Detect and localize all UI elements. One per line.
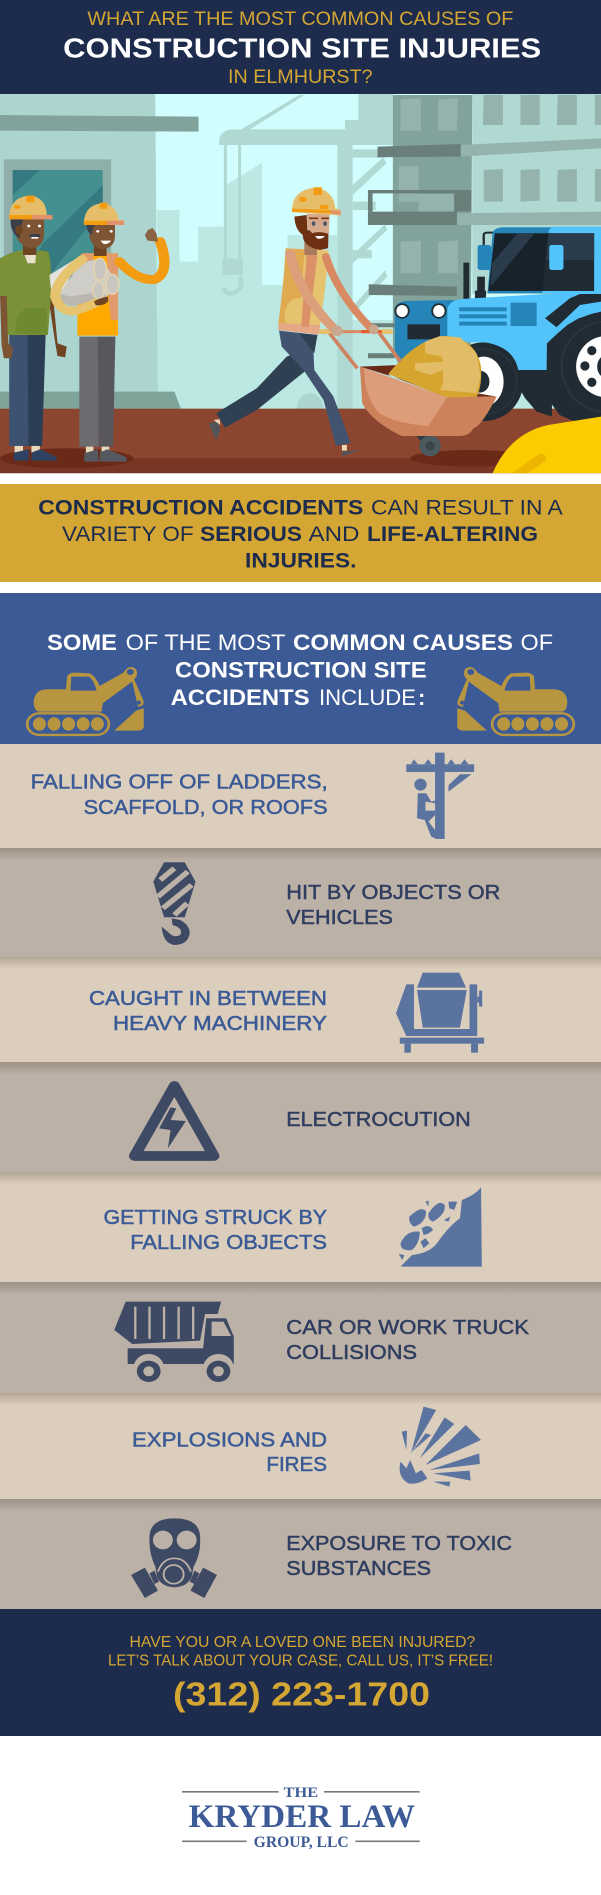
- blue heading line 1: SOME: [47, 630, 117, 655]
- row 8 text: SUBSTANCES: [286, 1557, 431, 1580]
- row 7 text: FIRES: [266, 1453, 327, 1476]
- row: hit by objects or vehicles: [0, 848, 601, 957]
- row: electrocution: [0, 1062, 601, 1172]
- logo word: the: THE: [284, 1785, 318, 1801]
- row: exposure to toxic substances: [0, 1499, 601, 1609]
- icon: rockslide: [399, 1187, 482, 1267]
- yellow mound: [493, 417, 601, 473]
- gold banner line 2: [62, 523, 538, 546]
- row 1 text: FALLING OFF OF LADDERS,: [31, 770, 328, 793]
- tractor: [394, 227, 601, 422]
- wheelbarrow: [321, 332, 497, 456]
- row: explosions and fires: [0, 1393, 601, 1499]
- left worker: [0, 196, 67, 461]
- gold banner line 1: [38, 496, 563, 519]
- row 4 text: ELECTROCUTION: [286, 1108, 471, 1131]
- blue heading line 1: COMMON CAUSES: [293, 630, 513, 655]
- row 6 text: COLLISIONS: [286, 1341, 417, 1364]
- blue heading line 3: INCLUDE: [319, 685, 416, 710]
- phone number: (312) 223-1700: [173, 1676, 430, 1713]
- header line 1: WHAT ARE THE MOST COMMON CAUSES OF: [87, 8, 513, 30]
- blue heading line 3: :: [418, 685, 425, 710]
- gold banner line 1: CONSTRUCTION ACCIDENTS: [38, 496, 363, 519]
- icon: excavator right: [457, 667, 574, 735]
- gold banner line 2: VARIETY OF: [62, 523, 194, 546]
- logo word: group llc: GROUP, LLC: [254, 1834, 349, 1851]
- icon: dump truck: [114, 1302, 234, 1384]
- hero illustration: construction workers and tractor: [0, 94, 601, 475]
- row 3 text: [89, 987, 327, 1035]
- icon: cement mixer: [396, 973, 484, 1053]
- icon: worker climbing pole: [406, 753, 474, 839]
- gold statement banner: [0, 484, 601, 582]
- call to action panel: [0, 1609, 601, 1736]
- logo: The Kryder Law Group, LLC: [182, 1785, 420, 1851]
- row 7 text: [132, 1428, 327, 1476]
- row 3 text: CAUGHT IN BETWEEN: [89, 987, 327, 1010]
- icon: explosion burst: [400, 1407, 481, 1487]
- row 5 text: [104, 1206, 327, 1254]
- gold banner line 3: INJURIES.: [245, 550, 356, 573]
- blue heading line 1: OF THE MOST: [126, 630, 286, 655]
- row 2 text: HIT BY OBJECTS OR: [286, 881, 500, 904]
- row 8 text: [286, 1532, 512, 1580]
- call to action text: LET’S TALK ABOUT YOUR CASE, CALL US, IT’S FREE!: [108, 1653, 493, 1670]
- row 3 text: HEAVY MACHINERY: [113, 1012, 327, 1035]
- row: caught in between heavy machinery: [0, 957, 601, 1062]
- row 6 text: CAR OR WORK TRUCK: [286, 1316, 529, 1339]
- row: getting struck by falling objects: [0, 1172, 601, 1282]
- row: car or work truck collisions: [0, 1282, 601, 1393]
- header banner: [0, 0, 601, 94]
- row 7 text: EXPLOSIONS AND: [132, 1428, 327, 1452]
- row 5 text: GETTING STRUCK BY: [104, 1206, 327, 1229]
- blue heading line 3: ACCIDENTS: [171, 685, 310, 710]
- icon: excavator left: [27, 667, 144, 735]
- row 1 text: [31, 770, 328, 819]
- icon: electrical hazard triangle: [135, 1086, 214, 1156]
- gold banner line 1: CAN RESULT IN A: [371, 496, 563, 519]
- icon: crane hook: [153, 862, 195, 945]
- row 5 text: FALLING OBJECTS: [130, 1231, 327, 1254]
- header title: CONSTRUCTION SITE INJURIES: [63, 32, 541, 63]
- row 2 text: VEHICLES: [286, 906, 393, 929]
- row 6 text: [286, 1316, 529, 1364]
- gold banner line 2: LIFE-ALTERING: [367, 523, 538, 546]
- header line 3: IN ELMHURST?: [228, 66, 373, 88]
- logo word: kryder law: KRYDER LAW: [189, 1799, 415, 1835]
- gold banner line 2: SERIOUS: [200, 523, 302, 546]
- blue heading line 3: [171, 685, 425, 710]
- crane: [219, 94, 393, 410]
- icon: gas mask: [131, 1518, 217, 1598]
- row: falling off of ladders: [0, 744, 601, 848]
- row 2 text: [286, 881, 500, 929]
- right worker holding rolled plans: [49, 203, 164, 462]
- row 1 text: SCAFFOLD, OR ROOFS: [84, 796, 328, 819]
- row 8 text: EXPOSURE TO TOXIC: [286, 1532, 512, 1555]
- ground: [0, 409, 601, 473]
- blue heading line 1: OF: [520, 630, 553, 655]
- call to action text: HAVE YOU OR A LOVED ONE BEEN INJURED?: [130, 1634, 475, 1651]
- front wheel: [470, 342, 522, 421]
- tower and buildings: [472, 94, 601, 294]
- gold banner line 2: AND: [308, 523, 360, 546]
- rear wheel: [518, 312, 601, 422]
- call to action text: [108, 1634, 493, 1670]
- centre worker: [209, 187, 379, 456]
- blue heading line 2: CONSTRUCTION SITE: [175, 658, 427, 683]
- blue heading line 1: [47, 630, 553, 655]
- blue section heading panel: [0, 593, 601, 744]
